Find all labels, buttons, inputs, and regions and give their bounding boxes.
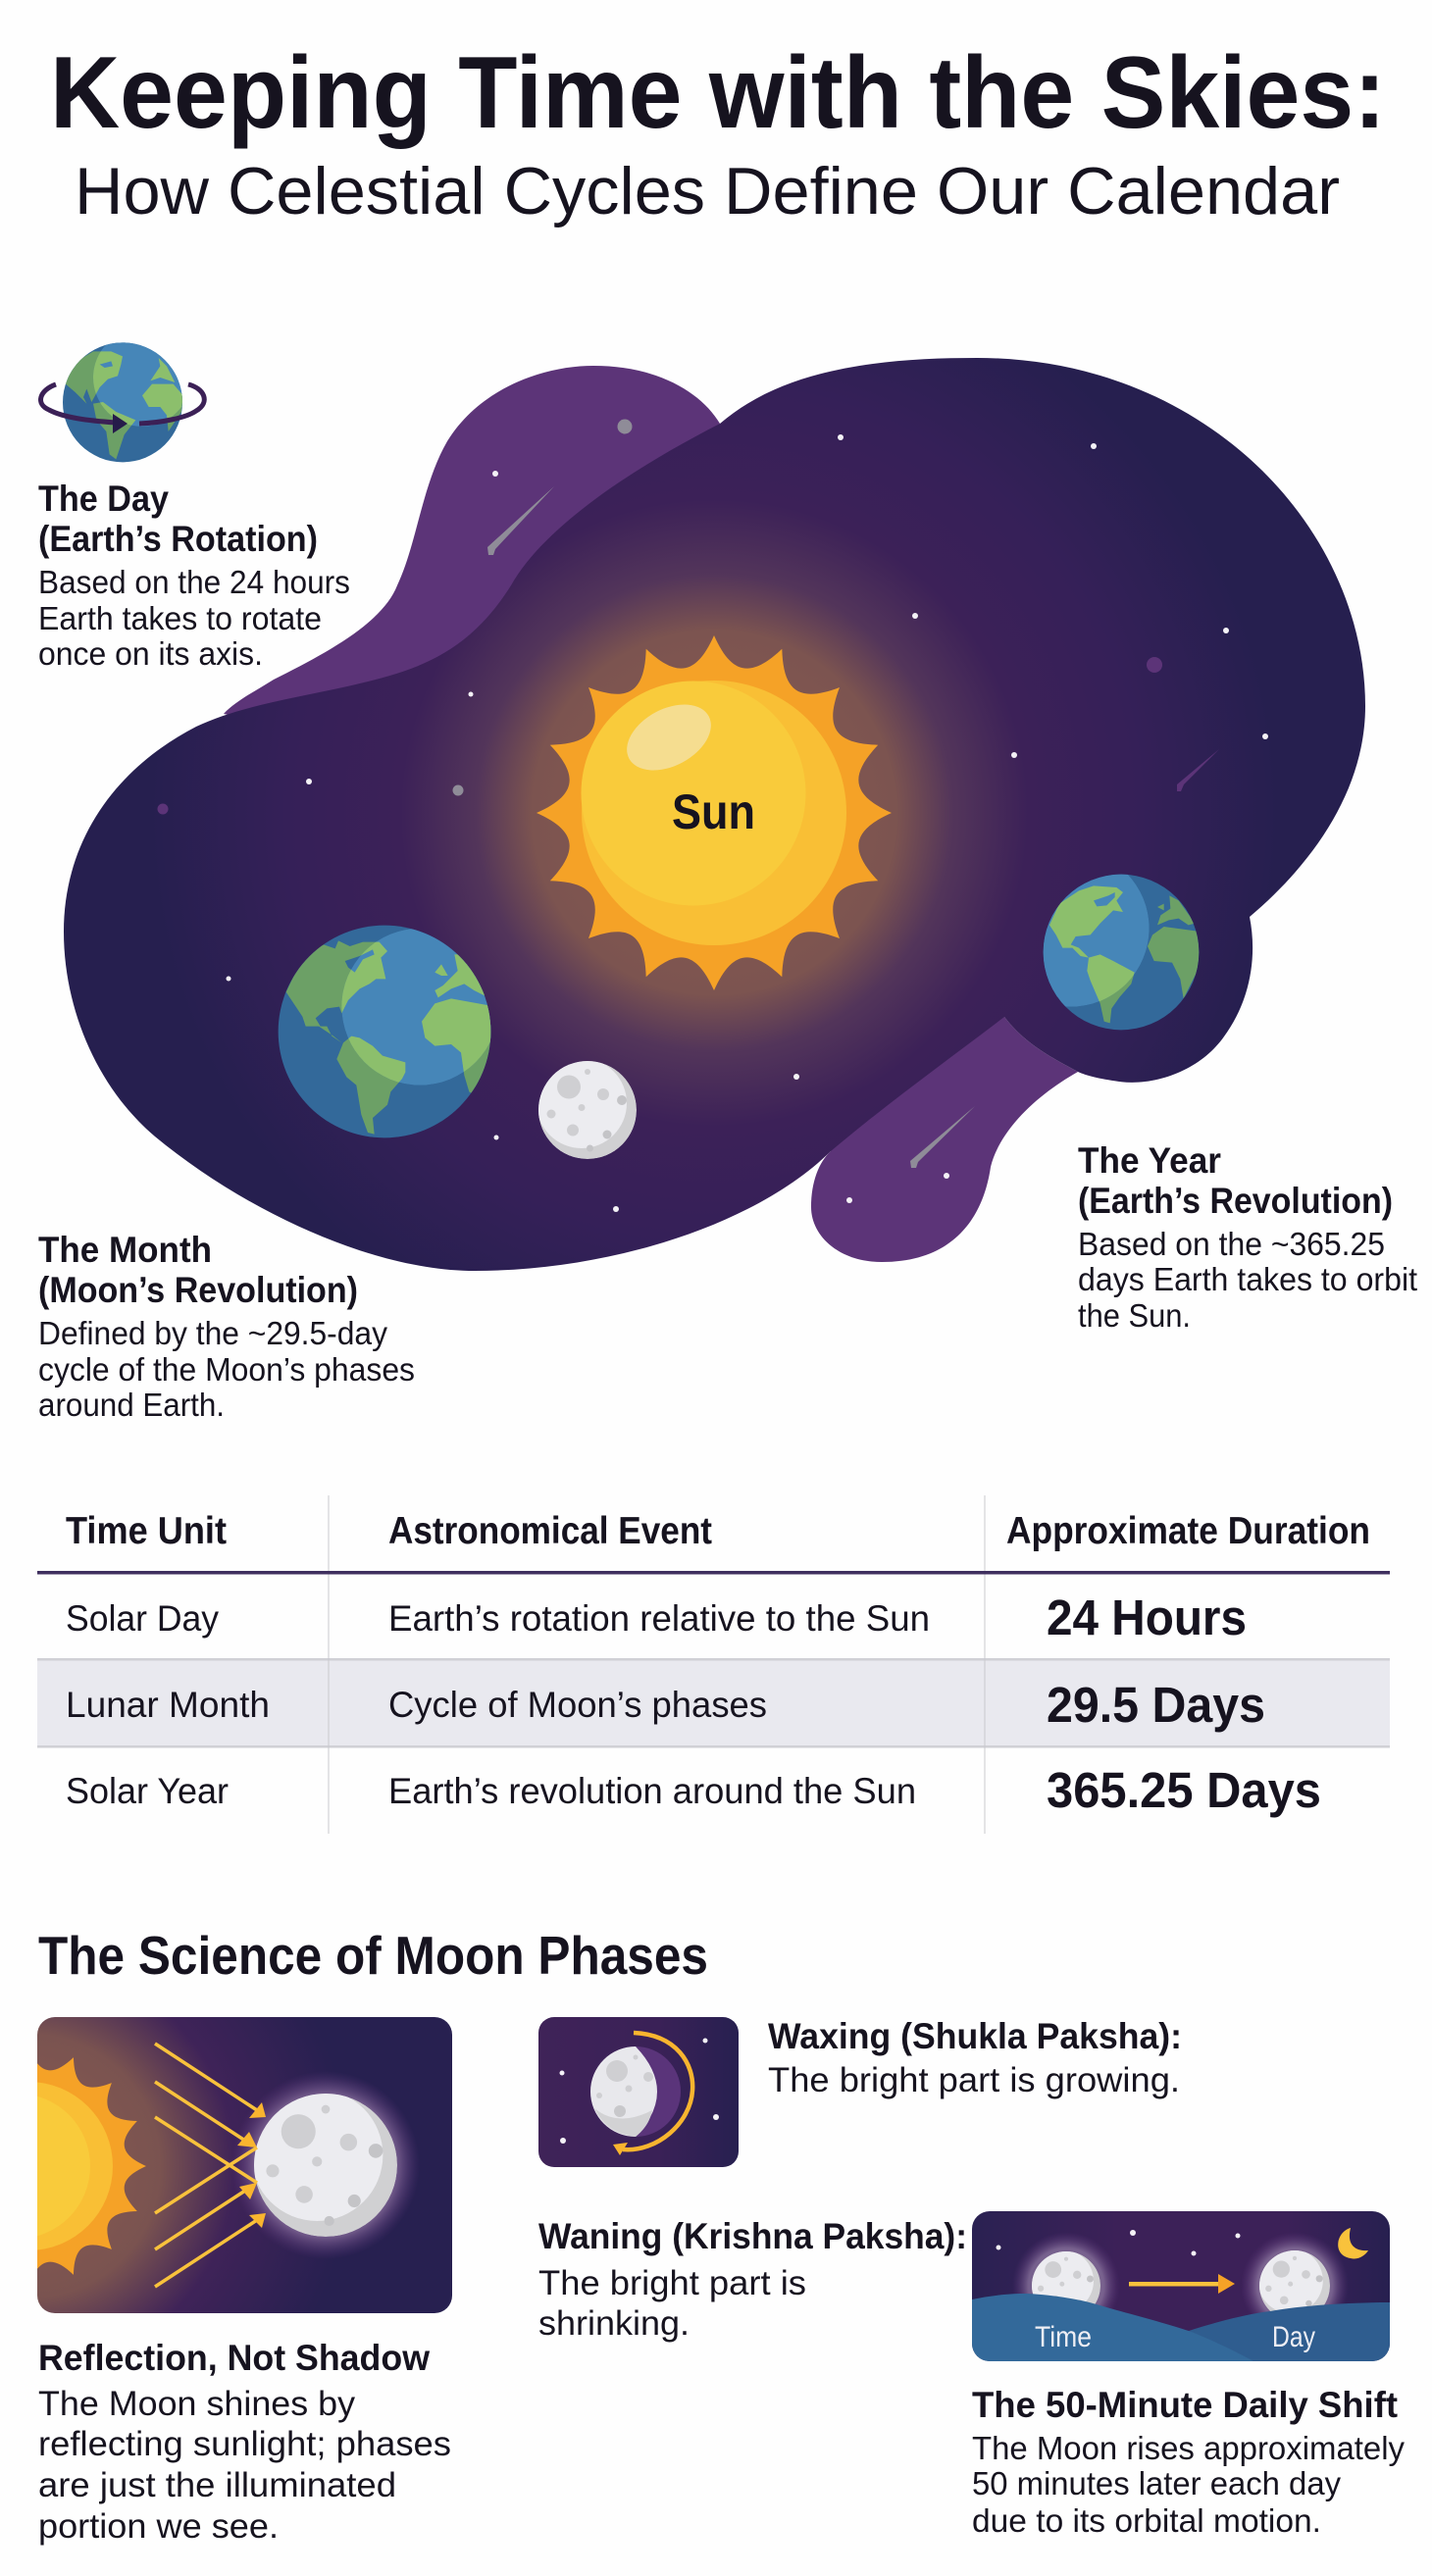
row: lunar month: [66, 1677, 1265, 1733]
sun: [537, 635, 892, 990]
text: waning: The bright part is: [538, 2264, 806, 2302]
text: the day: The Day: [38, 479, 169, 519]
text: waning: Waning (Krishna Paksha):: [538, 2216, 967, 2256]
table header: [66, 1510, 1370, 1552]
right earth: [1044, 875, 1199, 1030]
row: lunar month: Cycle of Moon’s phases: [388, 1685, 767, 1725]
text: the year: Based on the ~365.25: [1078, 1226, 1385, 1262]
text: the month: [38, 1230, 415, 1423]
table header: Time Unit: [66, 1510, 227, 1552]
row: solar year: Earth’s revolution around the Sun: [388, 1771, 916, 1811]
text: reflection: portion we see.: [38, 2507, 279, 2546]
text: waning: [538, 2216, 967, 2343]
text: the day: Based on the 24 hours: [38, 564, 350, 600]
row: lunar month: Lunar Month: [66, 1685, 270, 1725]
row: solar day: [66, 1590, 1247, 1645]
panel: reflection illustration: [0, 2017, 452, 2313]
text: waxing: Waxing (Shukla Paksha):: [768, 2016, 1182, 2056]
subtitle: How Celestial Cycles Define Our Calendar: [75, 154, 1340, 228]
text: reflection: are just the illuminated: [38, 2466, 396, 2504]
text: the month: (Moon’s Revolution): [38, 1270, 358, 1310]
text: reflection: [38, 2338, 451, 2546]
text: 50-minute shift: The 50-Minute Daily Shift: [972, 2385, 1398, 2425]
purple lower blob: [811, 981, 1078, 1262]
row: solar day: 24 Hours: [1047, 1590, 1247, 1645]
text: the day: (Earth’s Rotation): [38, 519, 318, 559]
title: Keeping Time with the Skies:: [50, 36, 1386, 150]
orbit arrow: [613, 2033, 692, 2155]
text: the month: around Earth.: [38, 1387, 225, 1423]
text: the month: The Month: [38, 1230, 212, 1270]
text: the year: the Sun.: [1078, 1297, 1191, 1334]
text: waxing: [768, 2016, 1182, 2099]
text: the day: once on its axis.: [38, 635, 263, 672]
panel: daily shift illustration: [972, 2211, 1390, 2361]
row: solar year: 365.25 Days: [1047, 1762, 1321, 1818]
section heading: The Science of Moon Phases: [38, 1925, 708, 1986]
waxing moon: [590, 2046, 657, 2137]
stars: [157, 420, 1268, 1212]
shift arrow: [1129, 2274, 1235, 2294]
purple upper blob: [224, 366, 720, 784]
row: lunar month: 29.5 Days: [1047, 1677, 1265, 1733]
sun label: Sun: [672, 784, 755, 839]
table header: Astronomical Event: [388, 1510, 712, 1552]
text: waxing: The bright part is growing.: [768, 2061, 1180, 2099]
text: the year: [1078, 1140, 1417, 1334]
hill labels: [1036, 2326, 1315, 2352]
large earth: [279, 926, 498, 1137]
text: reflection: reflecting sunlight; phases: [38, 2425, 451, 2463]
comets: [487, 486, 1219, 1168]
text: the month: cycle of the Moon’s phases: [38, 1351, 415, 1388]
moon: [537, 1058, 637, 1159]
row: solar day: Solar Day: [66, 1598, 219, 1639]
panel moon: [231, 2071, 420, 2259]
sunlight arrows: [155, 2044, 266, 2287]
text: the month: Defined by the ~29.5-day: [38, 1315, 387, 1351]
crescent moon: [1338, 2228, 1368, 2258]
row: solar year: [66, 1762, 1321, 1818]
text: the year: The Year: [1078, 1140, 1221, 1181]
text: the year: days Earth takes to orbit: [1078, 1261, 1417, 1297]
panel: waxing illustration: [538, 2017, 739, 2167]
text: 50-minute shift: [972, 2385, 1405, 2539]
hill labels: Day: [1272, 2321, 1315, 2353]
text: reflection: The Moon shines by: [38, 2385, 356, 2423]
row: solar year: Solar Year: [66, 1771, 229, 1811]
text: waning: shrinking.: [538, 2304, 690, 2343]
text: reflection: Reflection, Not Shadow: [38, 2338, 430, 2378]
space illustration: [64, 358, 1365, 1271]
dark sky blob: [64, 358, 1365, 1271]
rising moons: [1016, 2236, 1346, 2314]
text: 50-minute shift: The Moon rises approximately: [972, 2430, 1405, 2466]
icon: rotating earth: [41, 328, 204, 462]
text: the day: [38, 479, 350, 672]
text: 50-minute shift: due to its orbital motion.: [972, 2502, 1321, 2539]
table: [37, 1495, 1390, 1834]
row: solar day: Earth’s rotation relative to the Sun: [388, 1598, 930, 1639]
table header: Approximate Duration: [1006, 1510, 1370, 1552]
text: the day: Earth takes to rotate: [38, 600, 322, 636]
hills: [1189, 2302, 1390, 2361]
text: the year: (Earth’s Revolution): [1078, 1181, 1393, 1221]
hill labels: Time: [1035, 2321, 1092, 2353]
panel sun: [37, 2057, 146, 2275]
text: 50-minute shift: 50 minutes later each day: [972, 2465, 1341, 2501]
